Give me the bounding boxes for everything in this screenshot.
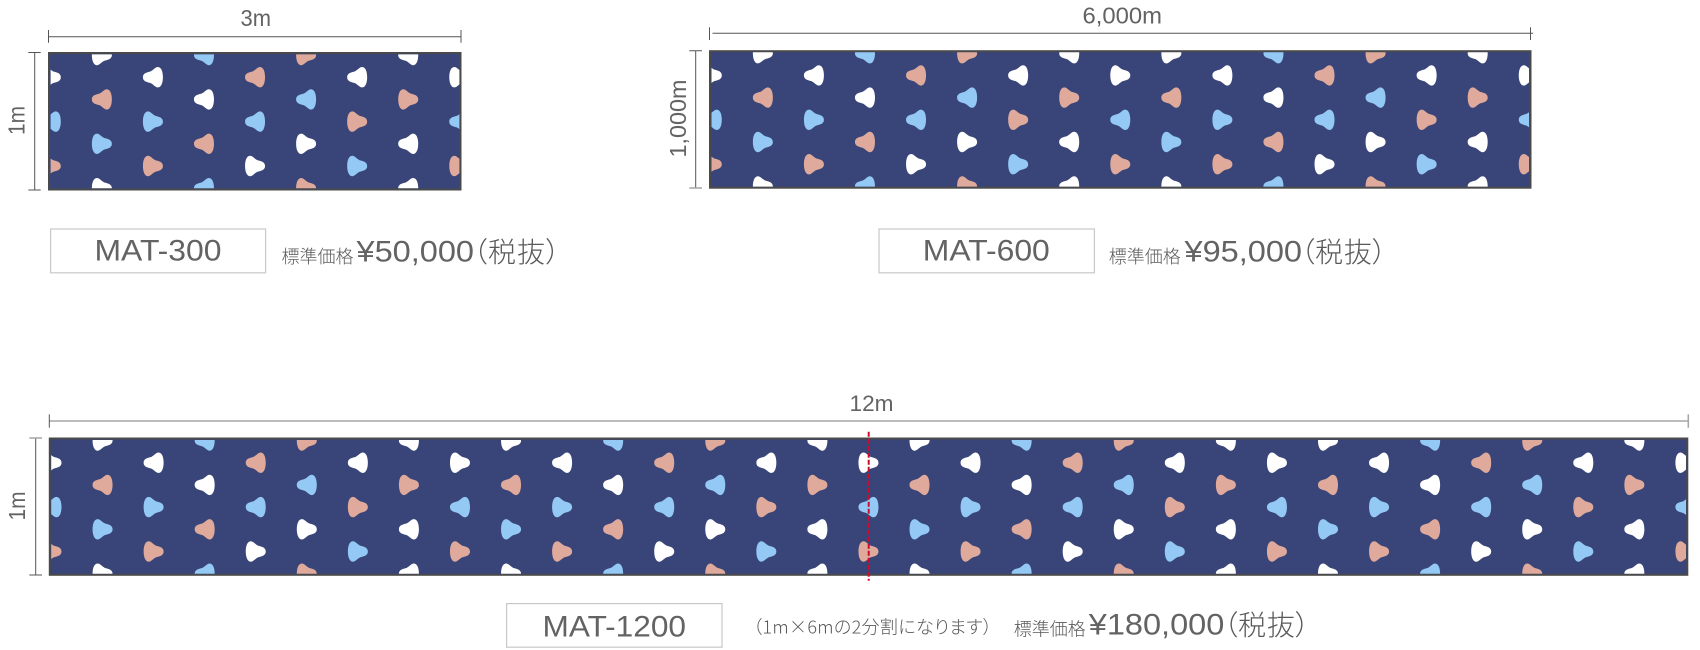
price: MAT-1200: 標準価格 — [1014, 616, 1086, 642]
width dimension: 3m — [48, 5, 461, 43]
price: MAT-1200: （税抜） — [1224, 604, 1310, 644]
model label: MAT-1200: MAT-1200 — [542, 611, 686, 644]
model label: MAT-300: MAT-300 — [94, 235, 222, 268]
panel: MAT-300 — [4, 5, 827, 273]
model label: MAT-300 — [51, 229, 266, 273]
panel: MAT-600 — [670, 8, 1533, 274]
price: MAT-1200: ¥180,000 — [1088, 608, 1224, 641]
model label: MAT-1200 — [507, 604, 722, 647]
height dimension: 1m — [4, 52, 41, 190]
width dimension: 12m — [49, 391, 1688, 428]
price: MAT-600: （税抜） — [1300, 231, 1386, 271]
price: MAT-600 — [1109, 231, 1386, 271]
width dimension: 6,000m — [710, 2, 1533, 40]
model label: MAT-600: MAT-600 — [923, 235, 1050, 268]
price: MAT-300 — [282, 231, 560, 271]
price: MAT-300: ¥50,000 — [355, 236, 474, 269]
price: MAT-300: （税抜） — [473, 231, 560, 271]
price: MAT-1200 — [1014, 604, 1310, 644]
price: MAT-600: ¥95,000 — [1183, 236, 1302, 269]
height dimension: 1,000m: 1,000m — [665, 80, 691, 158]
width dimension: 12m: 12m — [850, 391, 894, 416]
patterned mat 6m x 1m — [709, 50, 1532, 189]
height dimension: 1m: 1m — [4, 492, 30, 520]
width dimension: 3m: 3m — [240, 5, 271, 31]
price: MAT-600: 標準価格 — [1109, 243, 1181, 269]
height dimension: 1m — [4, 438, 42, 575]
red dashed split line at 6m — [868, 432, 870, 581]
height dimension: 1m: 1m — [4, 106, 30, 135]
note: split into two 1m x 6m pieces: （1m×6mの2分割になります） — [753, 614, 992, 640]
width dimension: 6,000m: 6,000m — [1082, 2, 1162, 28]
panel: MAT-1200 — [4, 391, 1700, 647]
patterned mat 3m x 1m — [48, 52, 462, 190]
model label: MAT-600 — [879, 229, 1094, 273]
price: MAT-300: 標準価格 — [282, 243, 354, 269]
patterned mat 12m x 1m — [48, 438, 1688, 576]
height dimension: 1,000m — [665, 51, 702, 188]
